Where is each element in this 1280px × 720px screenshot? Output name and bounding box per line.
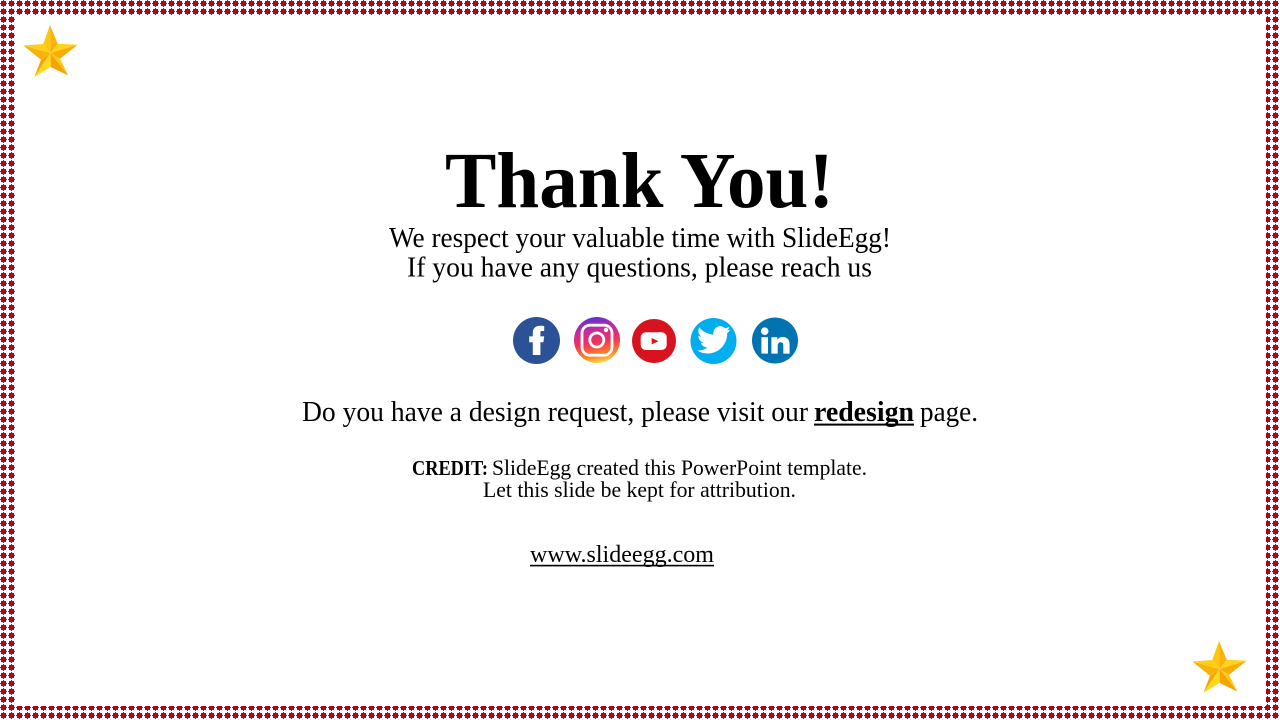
- credit text: CREDIT:: [412, 456, 488, 480]
- icon: linkedin: [752, 318, 798, 364]
- title: Thank You!: [445, 138, 834, 225]
- design request line: Do you have a design request, please visit our: [302, 397, 809, 428]
- design request line: page.: [920, 397, 978, 428]
- social icons row: [513, 317, 798, 364]
- icon: instagram: [574, 317, 620, 363]
- icon: youtube: [632, 319, 676, 363]
- icon: facebook: [513, 317, 560, 364]
- credit text: Let this slide be kept for attribution.: [483, 477, 796, 502]
- subtitle: We respect your valuable time with SlideEgg!: [389, 223, 891, 254]
- credit text: [412, 455, 867, 502]
- website link: www.slideegg.com: [530, 542, 714, 568]
- subtitle: If you have any questions, please reach us: [407, 252, 872, 284]
- icon: gold star top left: [23, 25, 78, 77]
- design request line: redesign: [814, 397, 914, 428]
- icon: twitter: [690, 318, 736, 364]
- credit text: SlideEgg created this PowerPoint template.: [492, 455, 867, 480]
- subtitle: [389, 223, 891, 284]
- icon: gold star bottom right: [1192, 641, 1247, 693]
